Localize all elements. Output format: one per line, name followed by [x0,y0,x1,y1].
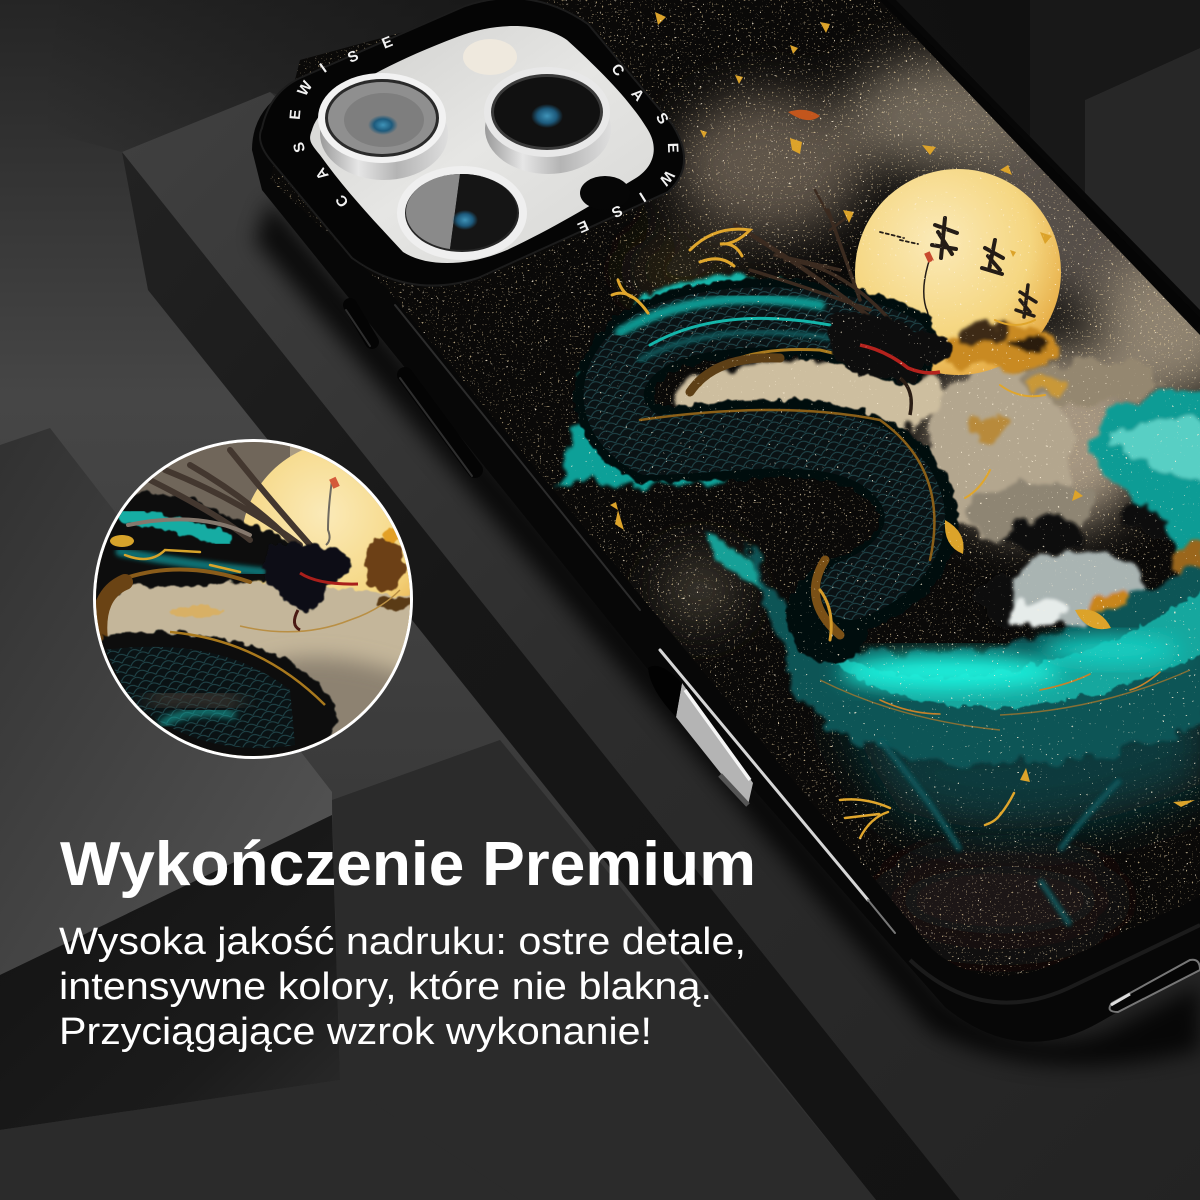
brand ring: CASEWISE: E [575,216,591,236]
inset: dragon head [262,544,350,612]
phone case body [252,0,1200,1042]
volume buttons [350,305,475,470]
black blotches [970,500,1171,632]
body text [59,921,746,1053]
brand ring: CASEWISE: I [636,189,649,205]
camera glass [310,26,654,263]
artwork on case [250,0,1200,1000]
brand ring: CASEWISE: S [290,140,309,154]
body text: Wysoka jakość nadruku: ostre detale, [59,921,746,963]
brand ring: CASEWISE: S [345,47,361,67]
left teal splash [552,276,790,590]
lens: right [484,67,611,174]
inset: burn on moon [167,527,413,617]
brand ring: CASEWISE: C [607,61,628,80]
inset: scaled body [100,632,338,770]
brand ring: CASEWISE [287,33,681,236]
sparse top speckle [250,0,1200,1000]
gold burn [942,322,1070,437]
camera bump [260,0,684,286]
inset: moon [244,450,410,628]
lens: left [318,73,448,180]
brand ring: CASEWISE: W [655,167,678,189]
side button [648,666,753,805]
microphone hole [580,176,630,210]
brand ring: CASEWISE: C [332,191,352,210]
right teal wave [1086,386,1200,556]
phone shadow [255,200,1200,1066]
brand ring: CASEWISE: E [664,143,681,153]
brand ring: CASEWISE: E [379,33,395,53]
dragon body [614,299,934,635]
body text: Przyciągające wzrok wykonanie! [59,1011,652,1053]
brand ring: CASEWISE: A [627,85,647,105]
inset: dragon mane and neck [96,490,290,606]
dragon head and antlers [735,190,952,415]
moon [855,169,1061,375]
cream smoke [675,358,1160,540]
edge highlights [395,305,895,933]
inset: cream ground [90,582,420,760]
brand ring: CASEWISE: I [317,60,330,76]
charging port [1110,960,1200,1012]
clouds [630,55,1200,950]
background: lower left block [0,428,876,1200]
inset detail circle [93,439,413,759]
gold flakes [612,229,1160,838]
brand ring: CASEWISE: S [609,201,625,221]
brand ring: CASEWISE: W [294,77,317,99]
white foam [1010,544,1200,628]
speckle texture [250,0,1200,1000]
flash [463,39,517,75]
brand ring: CASEWISE: E [287,109,304,120]
brand ring: CASEWISE: S [652,110,672,127]
big teal swoosh [745,540,1200,925]
brand ring: CASEWISE: A [312,164,332,183]
lens: bottom [397,166,527,260]
body text: intensywne kolory, które nie blakną. [59,966,712,1008]
title: Wykończenie Premium [60,830,756,899]
inset: upper cloud [112,442,290,530]
inset: whisker [326,480,332,545]
